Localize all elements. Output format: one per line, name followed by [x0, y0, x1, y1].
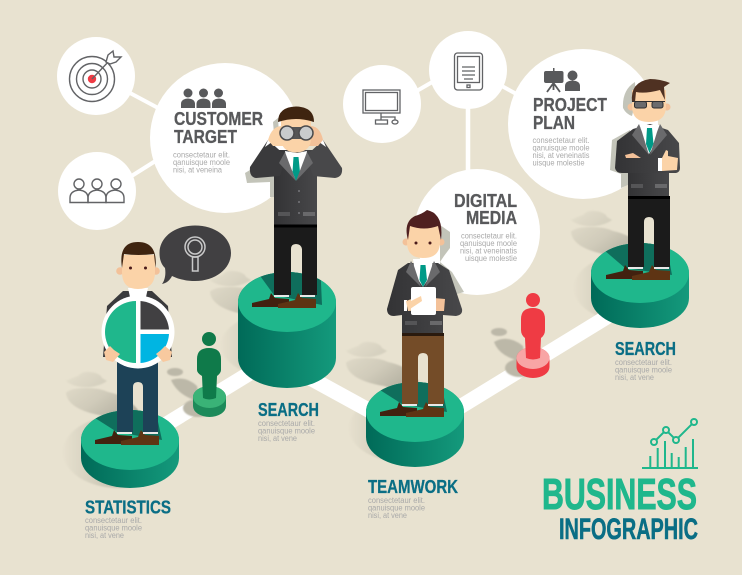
body text: consectetaur elit. [173, 150, 230, 160]
heading: CUSTOMER [174, 109, 263, 129]
body text: uisque molestie [532, 158, 585, 168]
head [281, 115, 311, 152]
label: search: consectetaur elit. [258, 419, 315, 428]
silhouette shadow [245, 118, 279, 197]
label: teamwork: consectetaur elit. [368, 496, 425, 505]
legs [117, 362, 158, 432]
hands and tablet [404, 287, 445, 315]
label: statistics [85, 498, 171, 540]
silhouette shadow [610, 82, 636, 188]
label: statistics: STATISTICS [85, 498, 171, 518]
label: search: nisi, at vene [258, 434, 297, 443]
panel: customer target [150, 63, 300, 213]
icon: tablet [454, 53, 482, 90]
red pawn [516, 293, 550, 378]
label: search right: qanuisque moole [615, 366, 673, 374]
icon: three filled people [181, 88, 226, 108]
disc [238, 260, 336, 388]
jacket [387, 263, 462, 336]
label: search: SEARCH [258, 400, 319, 420]
heading: MEDIA [466, 208, 517, 228]
legs [274, 227, 317, 295]
lower jacket [628, 165, 670, 199]
figure 3: man holding tablet [366, 210, 464, 467]
bubble: tablet icon [429, 31, 507, 109]
figure 1: man holding pie chart [81, 242, 179, 488]
body text: nisi, at veneinatis [532, 151, 590, 160]
icon: dartboard and arrow [70, 51, 121, 102]
ground shadows of discs and figures [63, 211, 682, 488]
body text: uisque molestie [465, 254, 518, 263]
hands [104, 346, 172, 362]
pawn shadows [167, 328, 535, 417]
title [542, 470, 698, 546]
figure 2: man with binoculars on tall disc [238, 106, 342, 388]
green pawn [193, 332, 226, 417]
heading: PROJECT [533, 95, 607, 115]
head [628, 79, 670, 122]
silhouette shadow [440, 225, 464, 296]
sunglasses [632, 102, 665, 108]
label: search [258, 400, 319, 443]
bubble: target icon [57, 37, 135, 115]
label: teamwork [368, 477, 458, 520]
bubble: monitor icon [343, 65, 421, 143]
collar and tie [640, 125, 660, 154]
collar and tie [285, 151, 307, 180]
pie chart [102, 296, 174, 368]
label: teamwork: nisi, at vene [368, 511, 407, 520]
body text: qanuisque moole [460, 239, 518, 248]
panel: project plan [508, 49, 658, 199]
torso [274, 150, 317, 225]
body text: consectetaur elit. [461, 232, 517, 240]
label: statistics: nisi, at vene [85, 531, 124, 540]
upper jacket with folded arms [615, 124, 680, 173]
collar and tie [413, 259, 433, 287]
disc [591, 238, 689, 328]
icon: magnifier [185, 237, 205, 271]
body text: qanuisque moole [532, 144, 590, 152]
icon: three outlined people [70, 179, 124, 202]
heading: PLAN [533, 113, 575, 133]
label: search: qanuisque moole [258, 426, 316, 436]
arms [250, 140, 286, 178]
hands and cuff [625, 150, 678, 171]
label: teamwork: qanuisque moole [368, 504, 426, 512]
head [116, 242, 160, 289]
icon: camera on tripod and person [544, 68, 580, 92]
legs [402, 335, 444, 404]
label: search right: consectetaur elit. [615, 358, 672, 367]
legs [628, 199, 670, 267]
jacket behind chart [103, 291, 172, 357]
binoculars [280, 126, 313, 140]
figure 4: man with sunglasses and folded arms [591, 79, 689, 328]
body text: nisi, at veneinatis [460, 246, 517, 256]
label: search right: nisi, at vene [615, 373, 654, 382]
label: statistics: qanuisque moole [85, 524, 143, 532]
label: teamwork: TEAMWORK [368, 477, 458, 497]
hands [268, 126, 288, 146]
white path connecting the discs [165, 312, 615, 425]
panel: digital media [414, 169, 540, 295]
icon: monitor [363, 90, 400, 124]
body text: consectetaur elit. [532, 136, 590, 145]
label: search right [615, 339, 676, 382]
label: search right: SEARCH [615, 339, 676, 359]
label: statistics: consectetaur elit. [85, 516, 142, 525]
heading: TARGET [174, 127, 237, 147]
head [402, 210, 444, 258]
body text: qanuisque moole [173, 158, 231, 167]
disc [81, 408, 179, 488]
disc [366, 378, 464, 467]
bubble: people icon [58, 152, 136, 230]
body text: nisi, at veneina [173, 166, 222, 174]
collar [128, 288, 148, 297]
connector lines between bubbles [130, 81, 520, 180]
speech bubble with magnifier [160, 226, 231, 284]
heading: DIGITAL [454, 191, 517, 211]
icon: growth chart [642, 419, 698, 468]
